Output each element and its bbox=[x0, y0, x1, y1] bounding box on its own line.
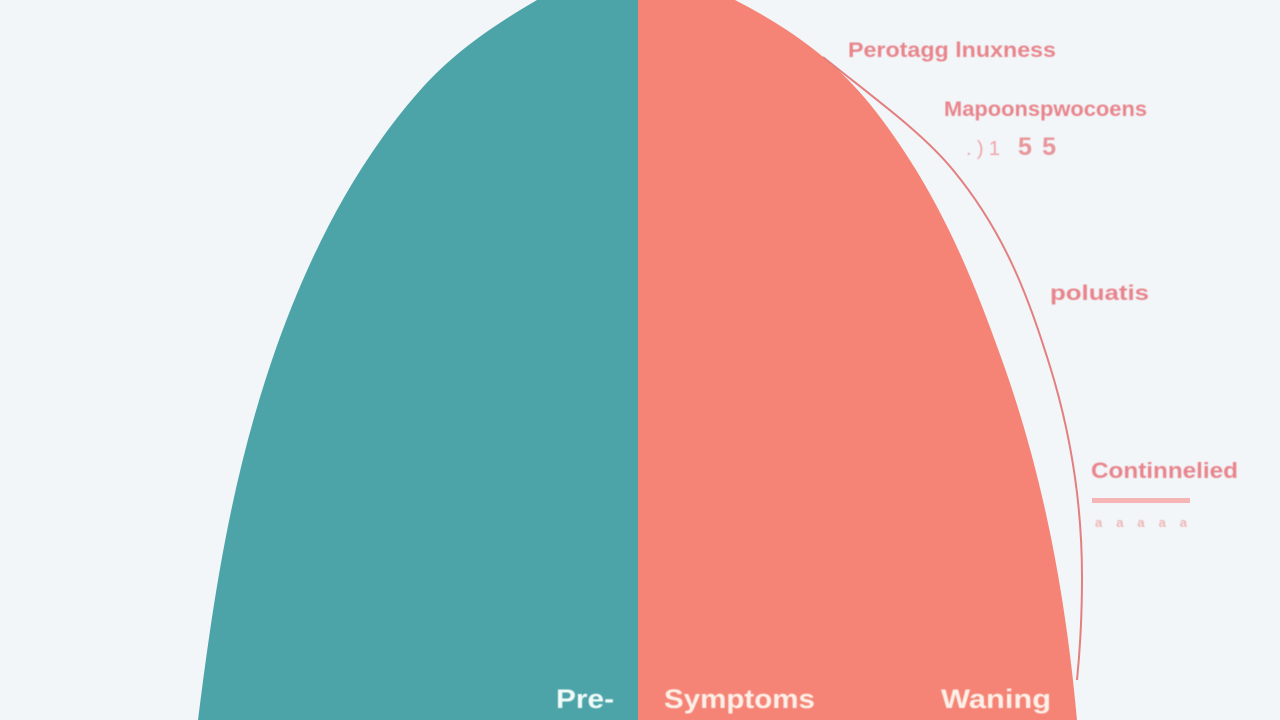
label: top annotation: Perotagg lnuxness bbox=[848, 39, 1056, 62]
label: second annotation value bbox=[966, 133, 1056, 161]
phase label: pre: Pre- bbox=[556, 684, 614, 714]
underline for fourth annotation bbox=[1092, 498, 1190, 503]
phase label: waning: Waning bbox=[941, 684, 1051, 714]
curve: symptoms and waning half bbox=[638, 0, 1077, 720]
curve: pre-symptom half bbox=[198, 0, 638, 720]
label: second annotation: Mapoonspwocoens bbox=[944, 98, 1147, 121]
phase label: symptoms: Symptoms bbox=[664, 684, 815, 714]
label: second annotation value: .)1 bbox=[966, 138, 1000, 160]
label: fourth annotation detail: a a a a a bbox=[1095, 515, 1188, 530]
outline: thin curve arc bbox=[823, 57, 1082, 680]
label: third annotation: poluatis bbox=[1050, 282, 1149, 305]
label: fourth annotation: Continnelied bbox=[1091, 458, 1238, 483]
label: second annotation value: 55 bbox=[1018, 133, 1056, 161]
